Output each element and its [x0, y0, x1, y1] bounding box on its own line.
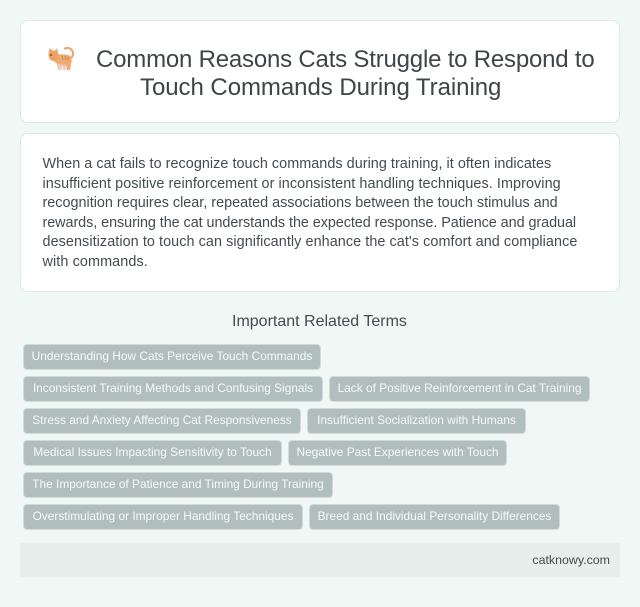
heading: related terms: Important Related Terms	[232, 313, 407, 330]
tag: Medical Issues Impacting Sensitivity to Touch	[33, 445, 272, 459]
panel: title card	[20, 20, 620, 123]
body text: desensitization to touch can significantly enhance the cat's comfort and compliance	[42, 234, 577, 250]
tag	[23, 472, 333, 498]
footer bar	[20, 543, 620, 577]
tag: Lack of Positive Reinforcement in Cat Training	[338, 381, 581, 395]
tag: Breed and Individual Personality Differences	[318, 509, 551, 523]
heading line 1: Common Reasons Cats Struggle to Respond to	[96, 46, 595, 73]
tag: Overstimulating or Improper Handling Techniques	[33, 509, 293, 523]
tag: The Importance of Patience and Timing During Training	[32, 477, 324, 491]
body text: When a cat fails to recognize touch commands during training, it often indicates	[42, 156, 551, 172]
tag	[23, 408, 301, 434]
footer source: catknowy.com	[532, 553, 610, 567]
body text: recognition requires clear, repeated associations between the touch stimulus and	[42, 195, 558, 211]
body text: with commands.	[42, 254, 148, 270]
tag	[23, 440, 282, 466]
tag: Understanding How Cats Perceive Touch Commands	[32, 349, 312, 363]
tag: Stress and Anxiety Affecting Cat Responsiveness	[32, 413, 292, 427]
body text: insufficient positive reinforcement or inconsistent handling techniques. Improving	[42, 176, 561, 192]
panel: description	[20, 133, 620, 292]
tag	[307, 408, 526, 434]
tag	[288, 440, 507, 466]
tag	[23, 504, 303, 530]
tag	[309, 504, 560, 530]
tag	[23, 376, 323, 402]
body text	[42, 156, 577, 270]
body text: rewards, ensuring the cat understands the expected response. Patience and gradual	[42, 215, 576, 231]
tag: Inconsistent Training Methods and Confusing Signals	[33, 381, 313, 395]
tags: related terms	[23, 344, 590, 530]
tag: Insufficient Socialization with Humans	[317, 413, 516, 427]
icon: cat	[48, 46, 74, 70]
heading line 2: Touch Commands During Training	[140, 74, 501, 101]
tag	[329, 376, 590, 402]
tag: Negative Past Experiences with Touch	[296, 445, 499, 459]
tag	[23, 344, 321, 370]
